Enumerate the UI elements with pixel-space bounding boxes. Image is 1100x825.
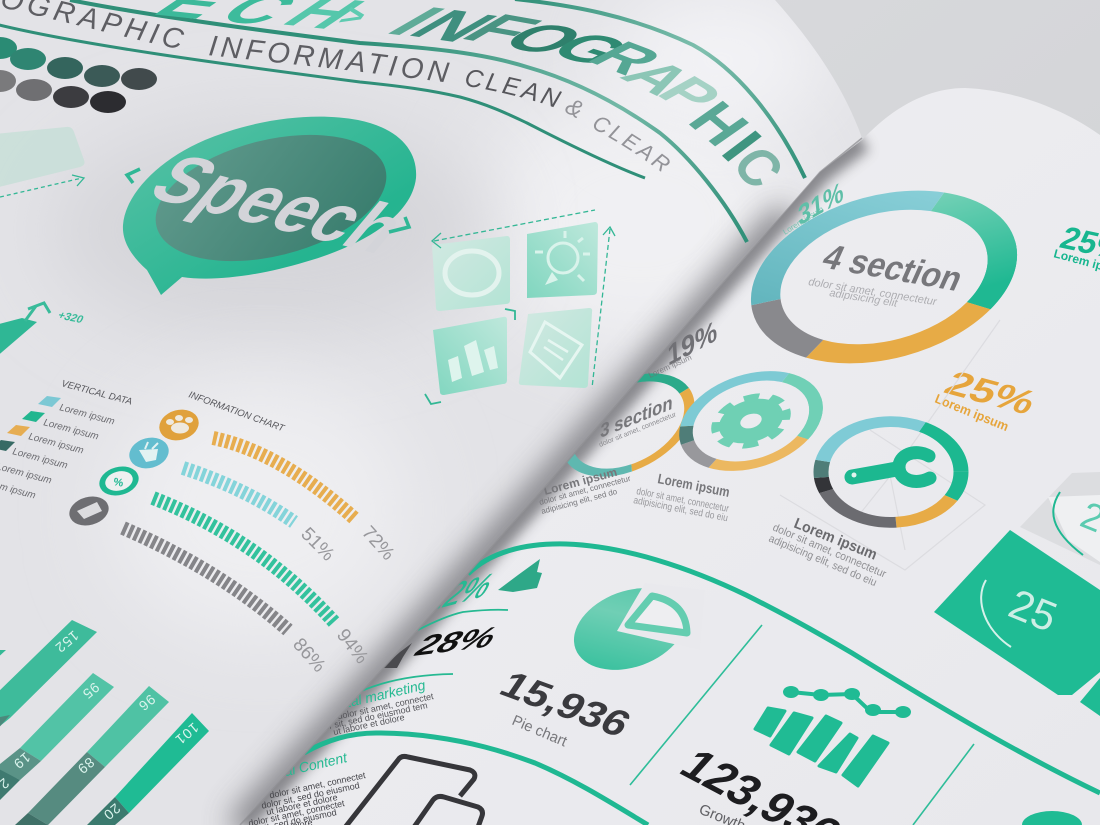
donut heading: 4 section (817, 237, 969, 298)
icon: wrench (852, 453, 930, 481)
title: R (572, 34, 678, 83)
title: F (444, 6, 558, 54)
icon: green percent circle: % (112, 476, 124, 490)
stat: 22 percent with thumb (418, 559, 542, 630)
main section curve (468, 544, 1100, 793)
dashed arrow right (592, 227, 615, 388)
percent labels: 86% (288, 634, 329, 677)
stat: 25 percent orange: Lorem ipsum (933, 391, 1011, 434)
lower section curve (304, 733, 648, 825)
donut caption: adipisicing elit (829, 287, 899, 310)
subtitle: CLEAR (594, 118, 670, 172)
percent labels: 51% (296, 524, 338, 566)
icon: phones (343, 756, 482, 825)
title (137, 0, 795, 199)
stat: 19 percent: Lorem ipsum (647, 353, 693, 380)
gear donut (679, 371, 823, 471)
column values: 20 (100, 800, 124, 824)
left caption: adipisicing elit, sed do (540, 487, 619, 516)
block: visual content: dolor sit amet, connectet (268, 770, 367, 800)
hatched bar: orange 72 percent (213, 438, 354, 518)
icon: thumbs up (498, 559, 542, 592)
growth bar with value (0, 303, 85, 358)
stat: 31 percent: 31% (797, 175, 845, 232)
icon: pie chart (574, 588, 690, 670)
wrench caption: dolor sit amet, connectetur (771, 522, 888, 581)
stat: 19 percent: 19% (667, 314, 718, 372)
block: visual content: ual Content (275, 749, 350, 781)
value label: +320 (56, 310, 85, 326)
title: P (644, 68, 737, 121)
right page (240, 88, 1100, 825)
right bracket (389, 217, 409, 232)
column values: 96 (135, 691, 159, 715)
gear caption: dolor sit amet, connectetur (635, 486, 730, 515)
metric label: Pie chart (509, 712, 570, 751)
column values: 101 (172, 720, 202, 748)
stat: 31 percent (782, 183, 843, 234)
dashed arrow left (0, 175, 84, 197)
wrench donut (821, 422, 961, 522)
legend: vertical data: Lorem ipsum (42, 417, 100, 443)
donut caption: dolor sit amet, connectetur (808, 276, 939, 308)
speech bubble (123, 113, 424, 295)
three section label: 3 section (600, 392, 673, 443)
corner markers (425, 309, 515, 404)
dashed arrow top (432, 210, 595, 248)
icon: green percent circle (96, 462, 142, 500)
column values (0, 628, 202, 824)
faint perspective guide lines (780, 320, 1000, 570)
legend: vertical data: Lorem ipsum (11, 446, 69, 472)
spine shadow on left page (240, 215, 790, 825)
legend: vertical data: Lorem ipsum (27, 431, 85, 457)
tile: speech (432, 236, 510, 311)
tile: light bulb (527, 222, 598, 298)
hatched bar: grey 86 percent (123, 528, 288, 630)
left caption: Lorem ipsum (542, 465, 619, 498)
colour swatch dots (0, 37, 157, 113)
column chart (0, 620, 209, 825)
up arrow (25, 303, 50, 321)
block: digital marketing: ut labore et dolore (332, 712, 405, 737)
tile: bars (433, 317, 507, 395)
column values: 19 (10, 749, 34, 773)
spine edge line (240, 138, 862, 825)
icon: growth bars with line (755, 686, 911, 786)
left bracket (127, 169, 140, 183)
heading: information chart: INFORMATION CHART (187, 389, 287, 435)
column values: 152 (52, 628, 82, 656)
stat: 28 percent (384, 627, 495, 668)
spine shadow on right page (240, 140, 862, 825)
legend: vertical data (0, 378, 133, 502)
subtitle: INFORMATION (209, 36, 450, 82)
block: visual content: dolor sit, sed do eiusmod (260, 780, 360, 811)
big four section donut (750, 190, 1018, 364)
percent labels (288, 522, 398, 677)
column values: 95 (79, 679, 103, 703)
legend: vertical data: VERTICAL DATA (60, 378, 133, 408)
title: I (709, 120, 775, 172)
block: digital marketing: dolor sit amet, connectet (336, 691, 435, 721)
stat: 25 percent orange: 25% (938, 364, 1044, 422)
partial teal icon bottom right (1022, 811, 1082, 825)
title: I (368, 0, 464, 44)
subtitle: CLEAN (466, 70, 562, 108)
gear caption: Lorem ipsum (656, 470, 731, 500)
grey tile with circular gauge (1020, 472, 1100, 565)
block: visual content (248, 753, 366, 825)
tile number: 25 (1003, 580, 1064, 641)
block: digital marketing: dolor sit, sed do eiusmod tem (311, 700, 428, 734)
column values: 89 (74, 754, 98, 778)
icon: grey chart circle (66, 492, 112, 530)
stat: 22 percent with thumb: 22% (420, 565, 501, 620)
legend: vertical data: Lorem ipsum (58, 402, 116, 428)
tile: document (519, 308, 592, 388)
divider line (630, 625, 762, 785)
wrench caption: adipisicing elit, sed do eiu (767, 533, 878, 589)
hatched bar: green 94 percent (153, 498, 334, 622)
teal number tile (934, 530, 1100, 716)
percent labels: 94% (332, 625, 372, 668)
three section donut (567, 373, 694, 477)
three section donut: dolor sit amet, connectetur (598, 411, 678, 449)
block: visual content: ut labore et dolore (265, 792, 338, 817)
subtitle (2, 0, 670, 172)
block: digital marketing: ital marketing (342, 677, 427, 711)
title: A (605, 52, 709, 103)
title: N (391, 1, 516, 50)
gear caption (634, 474, 730, 522)
stat: 19 percent (648, 322, 716, 378)
hatched bar: blue 51 percent (183, 468, 294, 522)
metric: pie chart value: 15,936 (492, 664, 639, 745)
title: G (533, 24, 647, 74)
icon tile grid (432, 222, 598, 395)
percent labels: 72% (357, 522, 398, 565)
icon: gear (711, 393, 791, 449)
stat: 31 percent: Lorem ipsum (781, 204, 826, 237)
title arcs (0, 0, 805, 242)
block: digital marketing (328, 673, 453, 735)
gear caption: adipisicing elit, sed do eiu (632, 495, 729, 524)
divider line 2 (913, 744, 974, 825)
stat: 25 percent orange (934, 372, 1033, 431)
icon: orange paw circle (156, 405, 202, 445)
title: C (720, 137, 795, 199)
subtitle: & (565, 100, 582, 118)
title: O (484, 14, 603, 63)
stat: 28 percent: 28% (408, 620, 505, 662)
title: H (675, 91, 762, 157)
wrench caption: Lorem ipsum (792, 515, 879, 564)
left caption: dolor sit amet, connectetur (538, 474, 632, 507)
speech word: Speech (134, 141, 424, 268)
icon: blue basket circle (126, 433, 172, 473)
tile arc (981, 580, 1011, 647)
faded icon tile (0, 127, 84, 188)
